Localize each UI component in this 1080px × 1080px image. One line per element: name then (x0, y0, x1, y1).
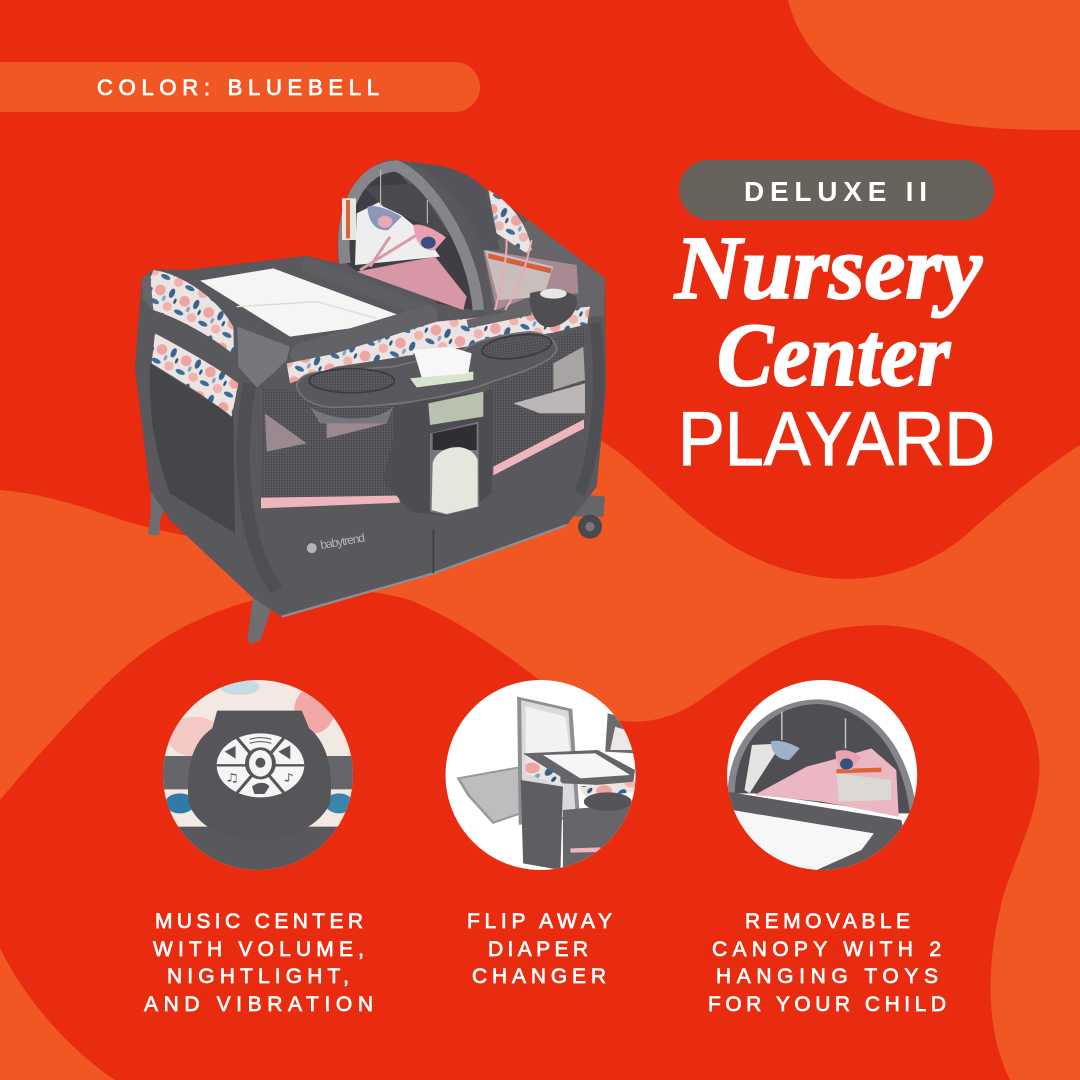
organizer tray (297, 331, 557, 423)
side pocket (150, 363, 235, 533)
rear panel and mesh (483, 220, 605, 323)
caption: music center: NIGHTLIGHT, (167, 965, 349, 988)
caption: diaper changer: CHANGER (472, 965, 606, 988)
diaper changer (187, 256, 438, 363)
floral side panels (142, 270, 238, 417)
brand logo: babytrend (319, 531, 366, 552)
caption: canopy (708, 910, 946, 1016)
title: Nursery (674, 219, 983, 318)
color tag (0, 62, 480, 112)
title: Center (717, 306, 951, 405)
caption: diaper changer: DIAPER (488, 938, 588, 961)
floral front rail (287, 307, 590, 383)
silhouette (135, 160, 606, 617)
photo: flip away changer (444, 677, 643, 877)
photo: canopy toys (727, 680, 918, 870)
model badge: DELUXE II (744, 176, 927, 207)
diaper organizer (383, 390, 493, 516)
canopy (342, 163, 532, 310)
title (674, 219, 995, 482)
color tag: COLOR: BLUEBELL (97, 75, 379, 100)
caption: music center: MUSIC CENTER (155, 910, 363, 933)
blob: top right (788, 0, 1080, 130)
caption: diaper changer (467, 910, 612, 988)
photo: music center: ♫ (225, 772, 240, 785)
front mesh (261, 327, 585, 498)
caption: canopy: CANOPY WITH 2 (712, 938, 941, 961)
music unit on rail (467, 289, 577, 328)
caption: canopy: HANGING TOYS (716, 965, 938, 988)
feature photos (160, 677, 924, 883)
playard product illustration (135, 160, 606, 644)
caption: music center: AND VIBRATION (144, 993, 373, 1016)
photo: music center: ♪ (283, 772, 294, 785)
pink trim stripes (261, 419, 584, 508)
legs and wheel (148, 490, 605, 644)
main body (135, 290, 605, 617)
caption: canopy: REMOVABLE (745, 910, 910, 933)
brand logo (305, 531, 366, 555)
photo: music center (160, 677, 359, 877)
blob: bottom left (0, 948, 115, 1080)
caption: music center (144, 910, 373, 1016)
caption: diaper changer: FLIP AWAY (467, 910, 612, 933)
caption: canopy: FOR YOUR CHILD (708, 993, 946, 1016)
wipes (410, 347, 473, 387)
title: PLAYARD (678, 397, 995, 482)
blob: middle band (0, 440, 1080, 1080)
model badge (679, 160, 994, 220)
caption: music center: WITH VOLUME, (153, 938, 364, 961)
corner connector (237, 327, 290, 387)
hanging toys (367, 170, 446, 250)
